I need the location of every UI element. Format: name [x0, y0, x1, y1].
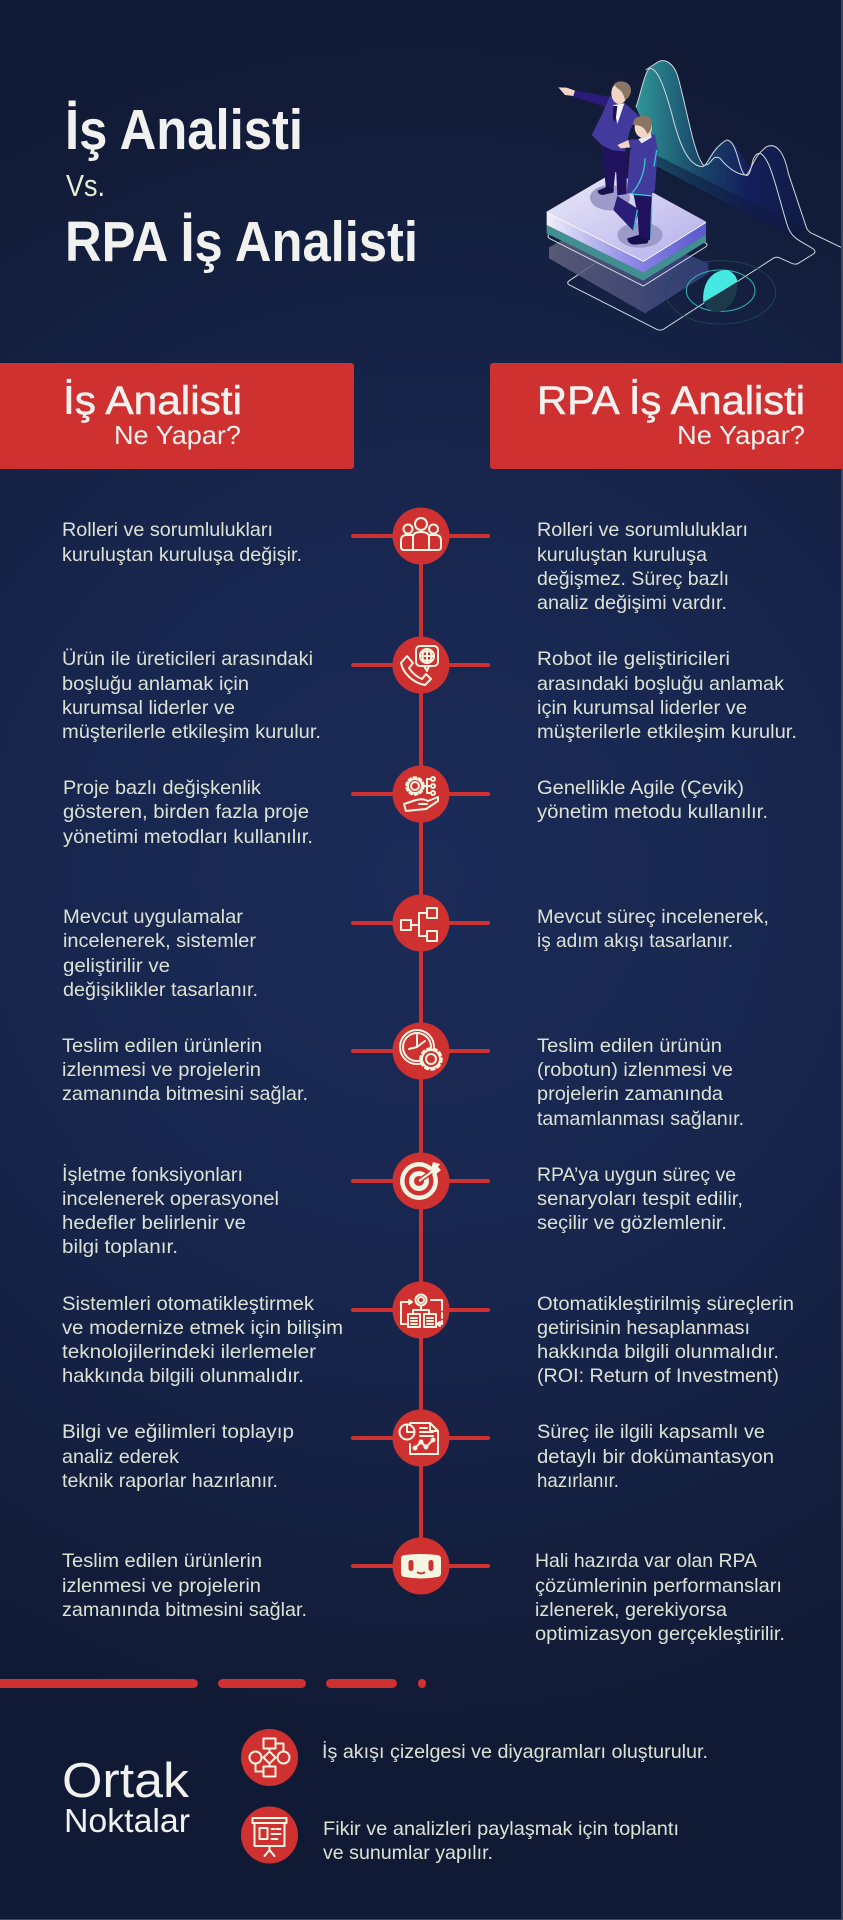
text: common point 2: ve sunumlar yapılır.	[323, 1842, 493, 1864]
right row 2	[537, 648, 797, 743]
left row 9: Teslim edilen ürünlerin	[62, 1550, 262, 1572]
left row 6	[62, 1163, 279, 1258]
icon: people	[392, 508, 450, 564]
right row 1: analiz değişimi vardır.	[537, 592, 727, 614]
left row 4: incelenerek, sistemler	[63, 930, 257, 952]
right row 4: iş adım akışı tasarlanır.	[537, 930, 733, 952]
left row 5: Teslim edilen ürünlerin	[62, 1035, 262, 1057]
right row 8	[537, 1421, 774, 1492]
right row 1: Rolleri ve sorumlulukları	[537, 519, 748, 541]
right row 5: tamamlanması sağlanır.	[537, 1108, 744, 1130]
wave chart area	[636, 60, 807, 237]
left row 8: teknik raporlar hazırlanır.	[62, 1470, 278, 1492]
right row 5: projelerin zamanında	[537, 1083, 723, 1105]
left row 6: hedefler belirlenir ve	[62, 1212, 246, 1234]
cyan disc with rings	[666, 261, 776, 324]
left row 6: İşletme fonksiyonları	[62, 1163, 243, 1186]
left row 3: Proje bazlı değişkenlik	[63, 777, 261, 799]
left row 8	[62, 1421, 294, 1492]
right row 2: müşterilerle etkileşim kurulur.	[537, 721, 797, 743]
title: Vs.	[66, 168, 105, 203]
man with briefcase	[613, 116, 658, 245]
right row 5: Teslim edilen ürünün	[537, 1035, 722, 1057]
icon: phone and globe	[392, 636, 450, 694]
header: İş Analisti Ne Yapar	[0, 363, 354, 469]
right row 8: hazırlanır.	[537, 1470, 619, 1492]
left row 7: teknolojilerindeki ilerlemeler	[62, 1341, 317, 1363]
right row 2: Robot ile geliştiricileri	[537, 648, 730, 670]
right row 9	[535, 1550, 785, 1645]
title	[65, 98, 418, 274]
left row 9: izlenmesi ve projelerin	[62, 1575, 261, 1597]
man pointing	[558, 81, 638, 195]
icon: presentation board	[241, 1806, 298, 1864]
right row 7: Otomatikleştirilmiş süreçlerin	[537, 1293, 794, 1315]
left row 7: ve modernize etmek için bilişim	[62, 1317, 343, 1339]
left row 2: müşterilerle etkileşim kurulur.	[62, 721, 321, 743]
right row 5: (robotun) izlenmesi ve	[537, 1059, 733, 1081]
left row 2: kurumsal liderler ve	[62, 697, 235, 719]
left row 8: analiz ederek	[62, 1446, 179, 1468]
right row 7: getirisinin hesaplanması	[537, 1317, 750, 1339]
right row 6: senaryoları tespit edilir,	[537, 1188, 743, 1210]
left row 2	[62, 648, 321, 743]
left row 5: zamanında bitmesini sağlar.	[62, 1083, 308, 1105]
right row 8: Süreç ile ilgili kapsamlı ve	[537, 1421, 765, 1443]
left row 9	[62, 1550, 307, 1621]
right row 3: yönetim metodu kullanılır.	[537, 801, 768, 823]
left row 7: hakkında bilgili olunmalıdır.	[62, 1365, 304, 1387]
right row 7: (ROI: Return of Investment)	[537, 1365, 779, 1387]
right row 9: optimizasyon gerçekleştirilir.	[535, 1623, 785, 1645]
platform top	[547, 172, 706, 261]
left row 5: izlenmesi ve projelerin	[62, 1059, 261, 1081]
left row 1: kuruluştan kuruluşa değişir.	[62, 544, 302, 566]
wave outlines	[568, 61, 841, 330]
ghost platform layer	[549, 218, 708, 313]
text: common point 1: İş akışı çizelgesi ve diyagramları oluşturulur.	[322, 1740, 708, 1763]
timeline connector lines	[353, 536, 488, 1566]
heading: Ortak Noktalar: Ortak	[62, 1754, 190, 1808]
heading: Ortak Noktalar: Noktalar	[64, 1802, 190, 1839]
right row 2: için kurumsal liderler ve	[537, 697, 747, 719]
left column text: İş Analisti	[62, 519, 343, 1621]
right row 1	[537, 519, 748, 614]
icon: report with chart	[392, 1410, 450, 1466]
left row 2: Ürün ile üreticileri arasındaki	[62, 648, 313, 670]
right column text: RPA İş Analisti	[535, 519, 797, 1645]
left row 3	[63, 777, 313, 848]
right row 3: Genellikle Agile (Çevik)	[537, 777, 744, 799]
left row 4: Mevcut uygulamalar	[63, 906, 244, 928]
icon: robot face	[392, 1538, 450, 1594]
platform side	[547, 212, 706, 273]
header: İş Analisti Ne Yapar: İş Analisti	[63, 378, 242, 423]
right row 4: Mevcut süreç incelenerek,	[537, 906, 769, 928]
left row 7	[62, 1293, 343, 1387]
icon: target	[392, 1152, 450, 1210]
illustration: analysts on platform with wave chart	[547, 60, 841, 330]
icon: process documents	[392, 1282, 450, 1338]
header: RPA İş Analisti Ne Yapar: Ne Yapar?	[677, 420, 805, 450]
header: İş Analisti Ne Yapar: Ne Yapar?	[114, 420, 241, 450]
left row 7: Sistemleri otomatikleştirmek	[62, 1293, 314, 1315]
left row 4: geliştirilir ve	[63, 955, 170, 977]
teal platform layer	[547, 225, 706, 281]
left row 2: boşluğu anlamak için	[62, 673, 249, 695]
right row 3	[537, 777, 768, 823]
text: common point 2: Fikir ve analizleri paylaşmak için toplantı	[323, 1818, 679, 1840]
icon: flowchart	[241, 1729, 298, 1786]
left row 4: değişiklikler tasarlanır.	[63, 979, 258, 1001]
left row 4	[63, 906, 258, 1001]
right row 8: detaylı bir dokümantasyon	[537, 1446, 774, 1468]
right row 2: arasındaki boşluğu anlamak	[537, 673, 784, 695]
right row 4	[537, 906, 769, 952]
left row 5	[62, 1035, 308, 1105]
right row 9: Hali hazırda var olan RPA	[535, 1550, 757, 1572]
right row 6: seçilir ve gözlemlenir.	[537, 1212, 727, 1234]
right row 9: çözümlerinin performansları	[535, 1575, 782, 1597]
text: common point 2	[323, 1818, 679, 1864]
left row 3: gösteren, birden fazla proje	[63, 801, 309, 823]
icon: clock and gear	[392, 1022, 450, 1080]
right row 1: değişmez. Süreç bazlı	[537, 568, 729, 590]
right row 7	[537, 1293, 794, 1387]
heading: Ortak Noktalar	[62, 1754, 190, 1839]
right row 6	[537, 1164, 743, 1234]
right row 5	[537, 1035, 744, 1130]
left row 3: yönetimi metodları kullanılır.	[63, 826, 313, 848]
right row 9: izlenerek, gerekiyorsa	[535, 1599, 727, 1621]
right row 1: kuruluştan kuruluşa	[537, 544, 707, 566]
right row 6: RPA’ya uygun süreç ve	[537, 1164, 736, 1186]
left row 1	[62, 519, 302, 566]
header: RPA İş Analisti Ne Yapar	[490, 363, 843, 469]
left row 1: Rolleri ve sorumlulukları	[62, 519, 273, 541]
right row 7: hakkında bilgili olunmalıdır.	[537, 1341, 779, 1363]
left row 6: incelenerek operasyonel	[62, 1188, 279, 1210]
section divider: dashes	[0, 1679, 426, 1688]
left row 6: bilgi toplanır.	[62, 1236, 178, 1258]
left row 9: zamanında bitmesini sağlar.	[62, 1599, 307, 1621]
header: RPA İş Analisti Ne Yapar: RPA İş Analisti	[537, 378, 805, 423]
icon: gear, nodes and hand	[392, 766, 450, 822]
title: RPA İş Analisti	[65, 210, 418, 274]
title: İş Analisti	[65, 98, 303, 162]
icon: flow blocks	[392, 894, 450, 952]
left row 8: Bilgi ve eğilimleri toplayıp	[62, 1421, 294, 1443]
